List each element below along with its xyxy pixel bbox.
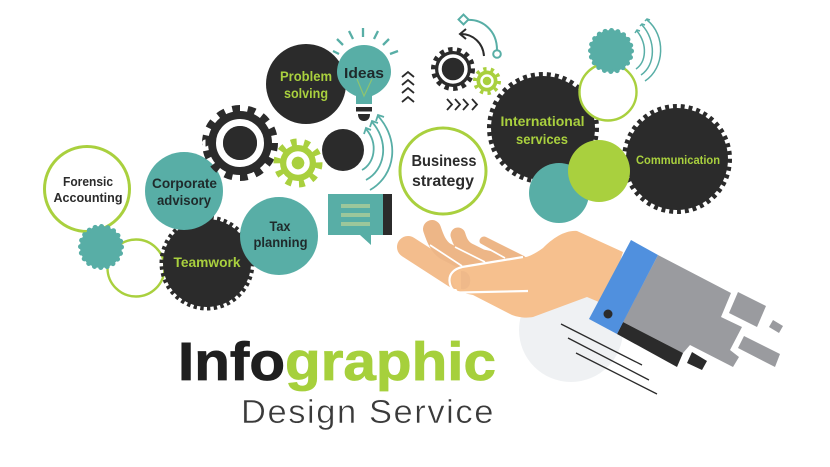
icon: curved teal arrows xyxy=(362,115,392,190)
small green ring xyxy=(108,240,164,296)
icon: hand with suit sleeve xyxy=(408,229,742,367)
icon: signal arcs xyxy=(635,19,661,81)
title: Infographic xyxy=(178,332,496,392)
icon: large dark cog xyxy=(206,108,274,178)
panel: tax planning circle xyxy=(240,197,318,275)
green circle xyxy=(568,140,630,202)
green ring right xyxy=(580,64,636,120)
finger base fill xyxy=(436,247,522,280)
panel: international services gear: services xyxy=(516,132,568,147)
icon: green cog xyxy=(277,142,319,184)
panel: corporate advisory circle: advisory xyxy=(157,192,211,208)
icon: green cog small xyxy=(475,69,499,93)
icon: black curved arrow xyxy=(460,29,484,56)
dark circle xyxy=(322,129,364,171)
panel: tax planning circle: planning xyxy=(254,234,308,250)
sleeve xyxy=(623,255,742,367)
icon: sleeve pixel fragments xyxy=(687,292,783,370)
panel: teamwork gear xyxy=(162,218,252,308)
icon: upward chevrons xyxy=(402,72,414,102)
black cuff strip xyxy=(617,322,683,367)
panel: tax planning circle: Tax xyxy=(270,218,291,234)
panel: international services gear xyxy=(490,74,596,182)
icon: light bulb with Ideas label: Ideas xyxy=(344,65,384,82)
panel: communication gear: Communication xyxy=(636,155,720,167)
panel: corporate advisory circle xyxy=(145,152,223,230)
panel: international services gear: International xyxy=(500,114,584,129)
icon: dark cog small xyxy=(434,50,472,88)
icon: speech bubble xyxy=(328,194,392,245)
icon: teal arc with nodes xyxy=(459,15,501,58)
subtitle: Design Service xyxy=(241,393,495,430)
panel: forensic accounting ring xyxy=(44,146,130,232)
pale backdrop circle xyxy=(519,278,623,382)
icon: light bulb with Ideas label xyxy=(333,28,398,121)
panel: business strategy ring xyxy=(400,128,486,214)
panel: teamwork gear: Teamwork xyxy=(174,255,241,270)
icon: motion lines xyxy=(561,324,657,394)
teal scalloped badge right xyxy=(590,30,632,72)
cuff button xyxy=(604,310,612,318)
thumbnail shade xyxy=(461,271,470,289)
panel: business strategy ring: Business xyxy=(412,153,476,170)
teal scalloped badge left xyxy=(80,226,122,268)
blue cuff xyxy=(589,240,658,334)
panel: problem solving circle: Problem xyxy=(280,69,332,84)
panel: problem solving circle xyxy=(266,44,346,124)
panel: corporate advisory circle: Corporate xyxy=(152,175,217,191)
panel: problem solving circle: solving xyxy=(284,86,328,101)
panel: forensic accounting ring: Accounting xyxy=(54,191,122,205)
panel: forensic accounting ring: Forensic xyxy=(63,175,113,189)
teal circle xyxy=(529,163,589,223)
icon: right chevrons xyxy=(447,99,477,110)
panel: business strategy ring: strategy xyxy=(412,173,474,190)
panel: communication gear xyxy=(624,106,730,212)
